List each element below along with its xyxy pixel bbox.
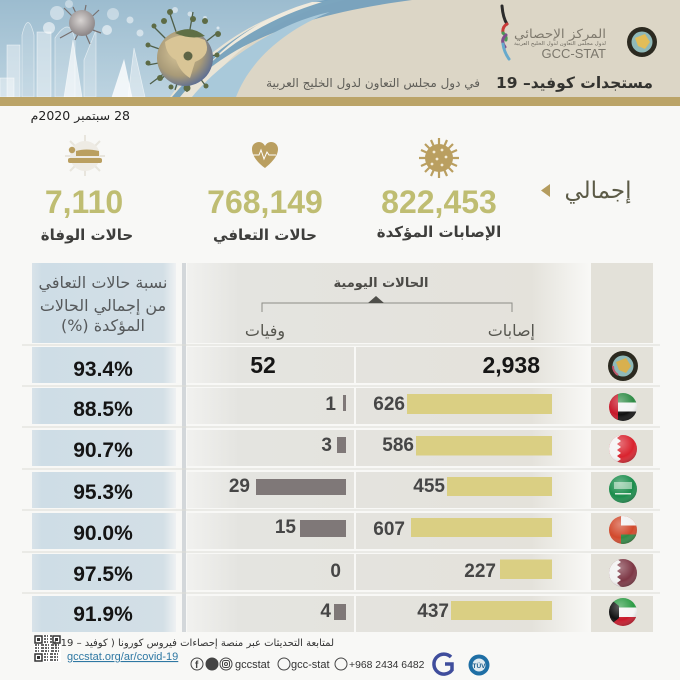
stat: recoveries — [207, 142, 323, 244]
logo wordmark: المركز الإحصائي — [514, 26, 606, 42]
table header: daily cases — [187, 263, 592, 343]
contact text: gccstat — [235, 659, 270, 671]
stat: recoveries: حالات التعافي — [213, 226, 317, 244]
row: Oman — [32, 513, 653, 549]
globe virus — [146, 9, 221, 92]
logo: GCC-STAT — [502, 6, 607, 61]
logo wordmark: GCC-STAT — [541, 46, 606, 61]
icon: heart — [252, 142, 278, 168]
row: Qatar: 0 — [330, 561, 341, 582]
icon: Bahrain flag — [609, 435, 637, 463]
row: Bahrain — [32, 430, 653, 466]
table header: recovery ratio — [32, 263, 176, 343]
section heading: total: إجمالي — [564, 178, 632, 204]
table — [32, 263, 653, 632]
contact text: gcc-stat — [291, 659, 330, 671]
table header: daily cases: وفيات — [245, 321, 285, 341]
row: Oman: 607 — [373, 519, 405, 540]
table header: recovery ratio: نسبة حالات التعافي — [39, 273, 167, 293]
row: Bahrain: 90.7% — [73, 439, 133, 462]
row: GCC total: 52 — [250, 352, 276, 378]
row: Qatar — [32, 554, 653, 590]
row: UAE: 1 — [325, 394, 336, 415]
row: GCC total: 93.4% — [73, 358, 133, 381]
row: Bahrain: 3 — [321, 435, 332, 456]
stat: recoveries: 768,149 — [207, 184, 323, 220]
table header: daily cases: الحالات اليومية — [334, 276, 428, 291]
icon: Qatar flag — [609, 559, 637, 587]
footer — [34, 635, 490, 676]
decorative bubbles — [43, 0, 220, 36]
logo wordmark: لدول مجلس التعاون لدول الخليج العربية — [514, 41, 607, 47]
stat: deaths: 7,110 — [45, 184, 123, 220]
row: Oman: 90.0% — [73, 522, 133, 545]
table header: daily cases: إصابات — [488, 321, 535, 340]
header banner — [0, 0, 680, 106]
stat: confirmed cases: الإصابات المؤكدة — [377, 223, 501, 241]
date: 28 سبتمبر 2020م — [31, 108, 130, 124]
row: UAE: 88.5% — [73, 398, 133, 421]
row: Kuwait: 4 — [320, 601, 331, 622]
row: Kuwait: 91.9% — [73, 603, 133, 626]
logo: certification G — [434, 654, 452, 674]
table header: recovery ratio: من إجمالي الحالات — [40, 296, 166, 316]
row: Oman: 15 — [275, 517, 296, 538]
gold band — [0, 97, 680, 106]
icon: Kuwait flag — [609, 598, 637, 627]
logo: TUV — [468, 654, 490, 676]
row: Saudi Arabia — [32, 472, 653, 508]
logo wordmark — [514, 26, 607, 61]
icon: Oman flag — [609, 516, 637, 544]
icon: UAE flag — [609, 393, 637, 422]
subtitle: في دول مجلس التعاون لدول الخليج العربية — [266, 76, 480, 91]
row: Saudi Arabia: 455 — [413, 476, 445, 497]
row: Saudi Arabia: 29 — [229, 476, 250, 497]
QR code — [34, 635, 61, 662]
row: UAE — [32, 388, 653, 424]
icon: Saudi flag — [609, 475, 637, 503]
virus ball — [60, 5, 101, 44]
footer: f — [195, 660, 199, 671]
footer note: لمتابعة التحديثات عبر منصة إحصاءات فيروس كورونا ( كوفيد – 19 ) — [54, 638, 334, 649]
row: Qatar: 97.5% — [73, 563, 133, 586]
table header: flag column — [591, 263, 653, 343]
social icons — [191, 658, 347, 670]
stat: deaths — [41, 135, 133, 244]
contact text: +968 2434 6482 — [349, 660, 425, 671]
table header: recovery ratio: المؤكدة (%) — [61, 316, 145, 336]
row: Bahrain: 586 — [382, 435, 414, 456]
row: UAE: 626 — [373, 394, 405, 415]
city skyline — [0, 22, 145, 97]
logo ribbon — [502, 6, 509, 59]
title: مستجدات كوفيد– 19 — [496, 74, 653, 92]
row: GCC total — [32, 347, 653, 383]
link: gccstat.org/ar/covid-19 — [67, 651, 178, 663]
stat: confirmed cases: 822,453 — [381, 184, 497, 220]
row: Kuwait — [32, 596, 653, 632]
contact text — [235, 659, 425, 671]
row: GCC total: 2,938 — [482, 352, 540, 378]
stat: deaths: حالات الوفاة — [41, 226, 133, 244]
icon: GCC emblem — [608, 351, 638, 381]
row: Qatar: 227 — [464, 561, 496, 582]
row: Saudi Arabia: 95.3% — [73, 481, 133, 504]
row separators and column divider — [22, 263, 660, 632]
icon: patient on bed — [65, 135, 105, 176]
arrow: total marker — [541, 184, 550, 197]
icon: GCC emblem — [627, 27, 657, 57]
row: Kuwait: 437 — [417, 601, 449, 622]
icon: virus — [419, 138, 459, 178]
logo: TUV: TÜV — [472, 661, 486, 670]
stat: confirmed cases — [377, 138, 501, 241]
